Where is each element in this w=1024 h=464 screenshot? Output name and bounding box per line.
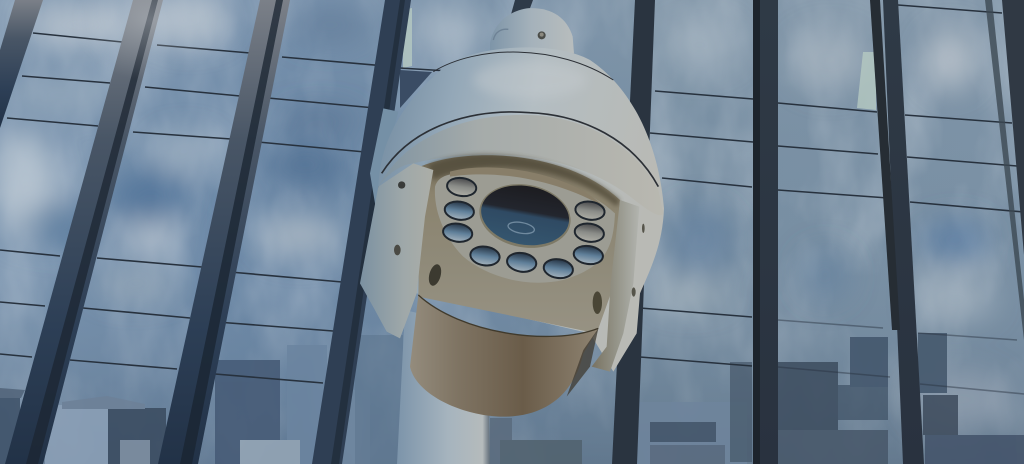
camera head (418, 155, 620, 333)
reflected city skyline (0, 333, 1024, 464)
mounting cap (490, 8, 574, 53)
light flare on upper left mullions (70, 0, 230, 80)
right side arm (592, 200, 645, 372)
lower camera housing (410, 295, 598, 417)
green glass shards (403, 8, 876, 110)
dome brim (378, 115, 663, 215)
main lens (474, 177, 576, 255)
dome security camera (360, 8, 664, 417)
dome shell (378, 47, 664, 372)
left bracket flange (370, 108, 398, 213)
dome highlight (473, 62, 587, 98)
camera mounting pole (397, 310, 490, 464)
dark reflection patch behind camera (400, 70, 432, 108)
infrared LED ring (442, 176, 606, 280)
lens face plate (435, 167, 615, 283)
left side arm (360, 163, 443, 338)
dome seam lines (382, 52, 658, 187)
